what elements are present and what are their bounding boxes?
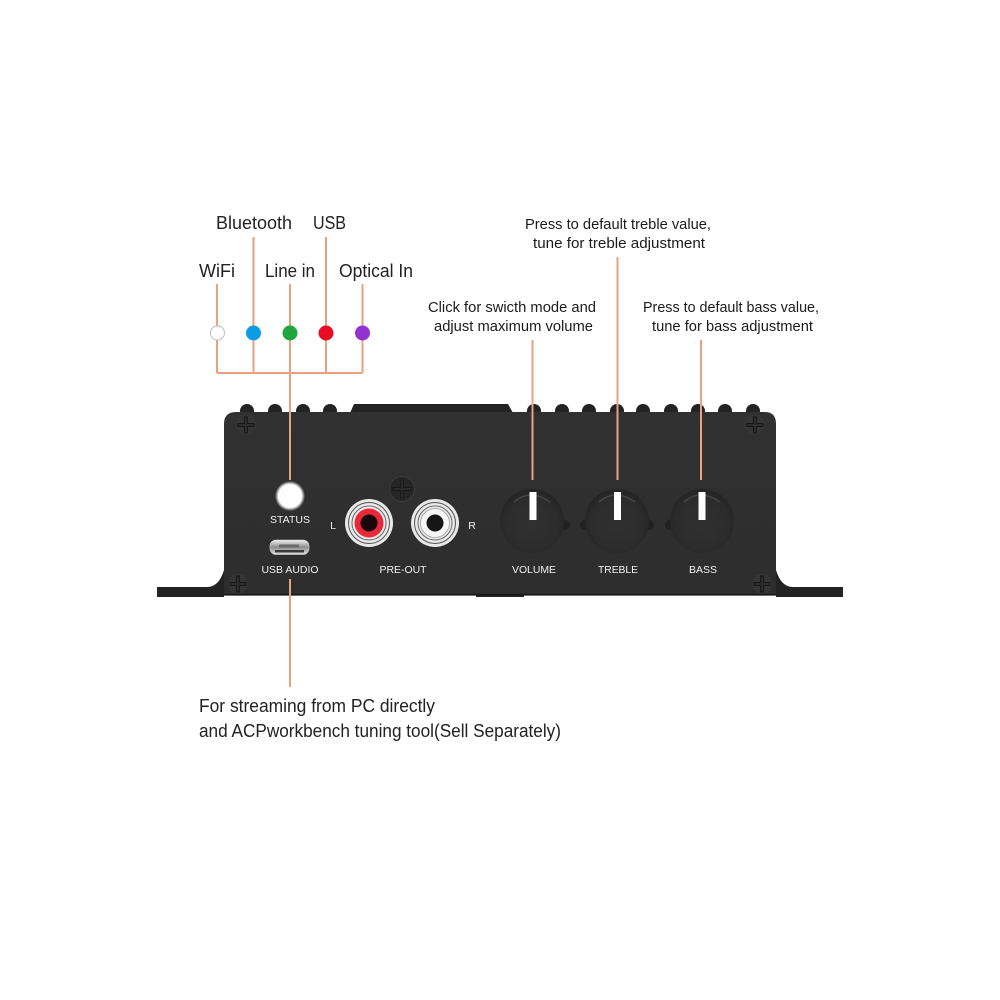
callout: volume: Click for swicth mode and — [428, 300, 596, 316]
label: USB AUDIO: USB AUDIO — [262, 564, 318, 576]
screw: centre — [390, 476, 414, 502]
LED dot: WiFi white — [210, 326, 224, 340]
LED dot: Bluetooth blue — [246, 326, 261, 340]
label: TREBLE: TREBLE — [598, 564, 638, 576]
label: USB: USB — [313, 213, 346, 233]
LED dot: Line in green — [282, 326, 298, 340]
USB port — [270, 540, 309, 554]
label: PRE-OUT: PRE-OUT — [380, 564, 427, 576]
screw: top right — [745, 415, 765, 435]
device: amplifier front panel — [157, 404, 843, 597]
LED dot: USB red — [318, 326, 334, 340]
label: Line in: Line in — [265, 261, 315, 281]
label: Bluetooth: Bluetooth — [216, 213, 292, 233]
callout: bass: tune for bass adjustment — [652, 319, 813, 335]
callout: USB audio: For streaming from PC directly — [199, 696, 435, 716]
knob: bass — [665, 489, 734, 553]
label: L: L — [330, 520, 336, 532]
connector lines: LED colour indicators — [217, 237, 362, 373]
label: Optical In: Optical In — [339, 261, 413, 281]
label: VOLUME: VOLUME — [512, 564, 556, 576]
device chassis — [157, 404, 843, 597]
callout: bass — [643, 300, 819, 335]
callout: volume: adjust maximum volume — [434, 319, 593, 335]
callout: USB audio — [199, 696, 561, 741]
status LED — [275, 481, 305, 511]
callout: volume — [428, 300, 596, 335]
arrow line: USB audio — [289, 579, 291, 687]
RCA jack: right, white — [411, 499, 459, 547]
knob: treble — [580, 489, 654, 553]
screw: bottom right — [752, 574, 772, 594]
arrow line: status LED — [289, 284, 291, 480]
screw: bottom left — [228, 574, 248, 594]
callout: treble — [525, 217, 711, 252]
label: STATUS: STATUS — [270, 514, 310, 526]
RCA jack: left, red — [345, 499, 393, 547]
callout: treble: Press to default treble value, — [525, 217, 711, 233]
LED dot: Optical In purple — [355, 326, 370, 340]
knob: volume — [500, 489, 570, 553]
callout: USB audio: and ACPworkbench tuning tool(Sell Separately) — [199, 721, 561, 741]
arrow line: volume — [532, 340, 534, 480]
callout: bass: Press to default bass value, — [643, 300, 819, 316]
label: R: R — [468, 520, 476, 532]
arrow line: bass — [700, 340, 702, 480]
screw: top left — [236, 415, 256, 435]
callout: treble: tune for treble adjustment — [533, 236, 705, 252]
label: BASS: BASS — [689, 564, 717, 576]
arrow line: treble — [616, 257, 618, 480]
label: WiFi: WiFi — [199, 261, 235, 281]
